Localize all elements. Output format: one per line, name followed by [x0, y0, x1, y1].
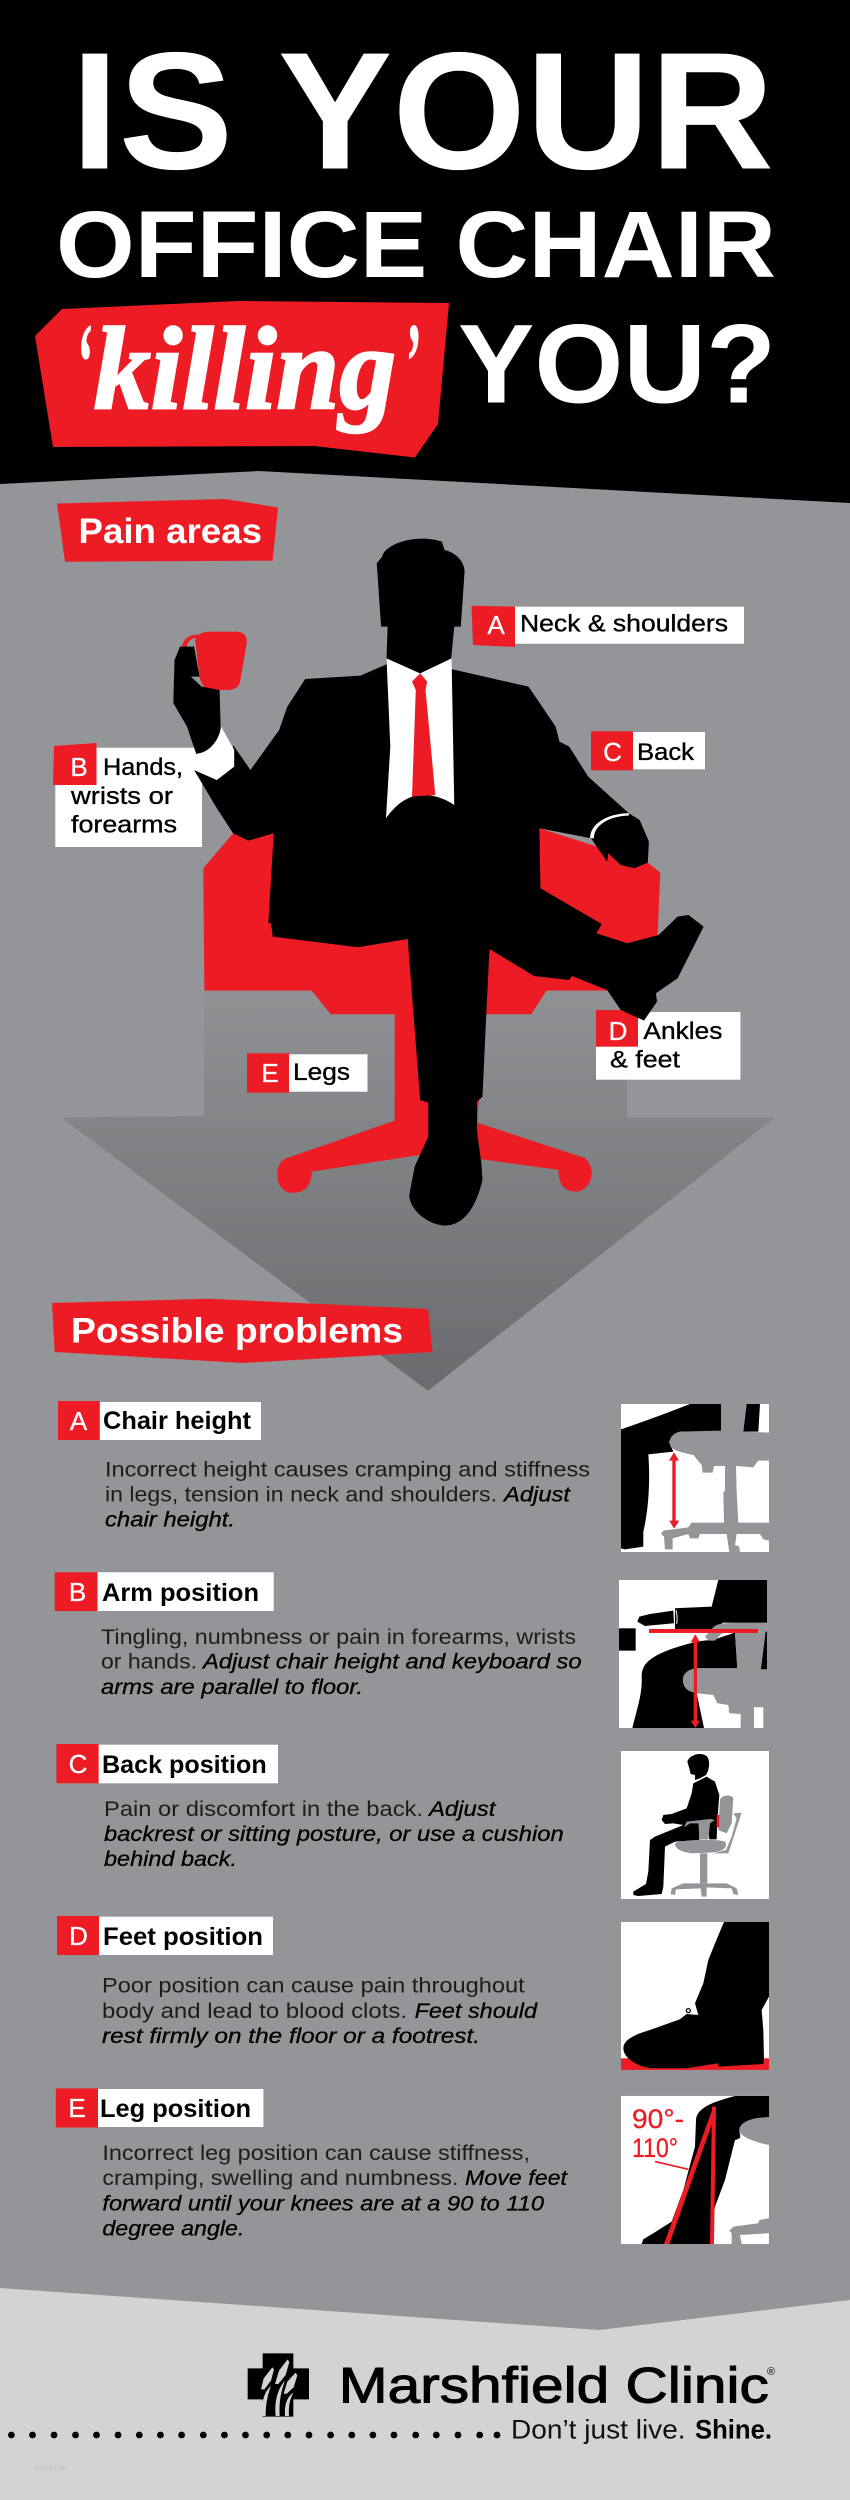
label C: back: Back [637, 739, 695, 766]
text: back position [104, 1798, 564, 1871]
text: arm position: arms are parallel to floor. [101, 1676, 363, 1699]
image: leg position [621, 2096, 769, 2244]
title: killing badge [35, 301, 449, 458]
red necktie [412, 673, 435, 797]
label D: ankles and feet: Ankles [643, 1018, 722, 1045]
tag: feet position: Feet position [103, 1923, 263, 1951]
text: arm position: Tingling, numbness or pain in forearms, wrists [101, 1626, 576, 1649]
angle label: 90°- [632, 2104, 684, 2134]
text: feet position: body and lead to blood clots. [102, 2000, 407, 2023]
tag: back position: C [69, 1749, 87, 1779]
chair back and frame [713, 1796, 742, 1853]
label E: legs: E [261, 1058, 279, 1088]
chair seat and base [671, 1819, 738, 1897]
text: chair height: Incorrect height causes cramping and stiffness [105, 1459, 590, 1482]
text: leg position: degree angle. [102, 2218, 244, 2240]
registered mark: ® [767, 2366, 775, 2378]
coffee mug [184, 632, 247, 690]
tagline: Don’t just live. [511, 2415, 686, 2445]
white shirt cuff [194, 727, 234, 780]
tag: leg position [56, 2088, 263, 2128]
title: you: YOU? [458, 302, 776, 426]
arrow: chair height [669, 1452, 679, 1529]
label E: legs [247, 1053, 368, 1093]
text: chair height [105, 1459, 590, 1532]
image: arm position [619, 1580, 767, 1728]
title: killing badge: ‘ [76, 301, 92, 423]
hand and wrist [173, 647, 221, 754]
tag: chair height: A [70, 1406, 88, 1436]
text: leg position [102, 2142, 568, 2240]
title: is your: IS YOUR [71, 18, 774, 204]
image: back position [621, 1751, 769, 1899]
title: office chair: OFFICE CHAIR [56, 192, 776, 298]
tagline [511, 2415, 772, 2445]
text: leg position: Incorrect leg position can cause stiffness, [102, 2142, 530, 2165]
background arrow [61, 950, 775, 1391]
text: back position: Adjust [427, 1798, 497, 1821]
label A: neck and shoulders [472, 606, 744, 647]
label A: neck and shoulders: Neck & shoulders [520, 611, 728, 638]
dotted line [8, 2432, 500, 2438]
tag: back position [56, 1744, 278, 1783]
problem B: arm position [55, 1572, 767, 1728]
header panel [0, 0, 850, 503]
label C: back: C [603, 737, 622, 767]
text: feet position: rest firmly on the floor or a footrest. [102, 2025, 480, 2048]
problem D: feet position [57, 1916, 769, 2070]
heading: possible problems [52, 1299, 432, 1363]
tag: arm position: Arm position [102, 1579, 259, 1607]
label E: legs: Legs [293, 1059, 350, 1086]
text: feet position [102, 1975, 538, 2048]
label C: back [591, 731, 705, 770]
text: chair height: Adjust [502, 1484, 571, 1507]
image: leg position: 110° [632, 2133, 678, 2163]
text: feet position: Poor position can cause pain throughout [102, 1975, 525, 1998]
job number: 12839-000 [33, 2465, 67, 2472]
icon: marshfield clinic logo [248, 2353, 309, 2417]
tag: chair height: Chair height [103, 1407, 252, 1435]
man silhouette [194, 539, 704, 1226]
title: killing badge: ’ [404, 301, 420, 423]
tag: feet position: D [69, 1921, 88, 1951]
text: back position: Pain or discomfort in the back. [104, 1798, 423, 1821]
tag: arm position: B [69, 1577, 86, 1607]
label B: hands, wrists or forearms: B [70, 752, 88, 782]
tag: feet position [57, 1916, 273, 1955]
heading: possible problems: Possible problems [71, 1312, 403, 1351]
text: leg position: cramping, swelling and numbness. [102, 2167, 458, 2190]
text: arm position [101, 1626, 582, 1699]
red office chair [203, 828, 660, 1193]
problem A: chair height [58, 1401, 769, 1552]
label B: hands, wrists or forearms: wrists or [70, 783, 173, 810]
text: feet position: Feet should [415, 2000, 538, 2023]
label A: neck and shoulders: A [487, 610, 505, 640]
tag: arm position [55, 1572, 274, 1611]
label D: ankles and feet: D [609, 1016, 627, 1046]
text: back position: backrest or sitting posture, or use a cushion [104, 1823, 564, 1846]
text: arm position: Adjust chair height and keyboard so [201, 1651, 582, 1674]
label B: hands, wrists or forearms: forearms [71, 812, 177, 839]
text: arm position: or hands. [101, 1651, 197, 1674]
label D: ankles and feet: & feet [610, 1047, 680, 1074]
problem C: back position [56, 1744, 769, 1899]
footer panel [0, 2288, 850, 2500]
label D: ankles and feet [596, 1010, 740, 1080]
text: chair height: chair height. [105, 1509, 235, 1532]
label B: hands, wrists or forearms: Hands, [103, 754, 183, 781]
logo wordmark: Marshfield Clinic [339, 2358, 769, 2414]
tagline: Shine. [695, 2415, 772, 2445]
text: chair height: in legs, tension in neck and shoulders. [105, 1484, 497, 1507]
problem E: leg position [56, 2088, 769, 2244]
text: leg position: forward until your knees are at a 90 to 110 [102, 2193, 544, 2216]
seated man illustration with chair [173, 539, 704, 1226]
heading: pain areas: Pain areas [78, 512, 262, 551]
tag: leg position: Leg position [100, 2095, 251, 2123]
tag: back position: Back position [102, 1751, 267, 1779]
label B: hands, wrists or forearms [53, 743, 202, 847]
white shirt [386, 658, 454, 818]
wrist cuff [592, 814, 629, 838]
title: killing badge: killing [94, 303, 396, 434]
text: leg position: Move feet [465, 2167, 568, 2190]
image: chair height [621, 1404, 769, 1552]
heading: pain areas [57, 499, 278, 562]
arrow: arm height [649, 1629, 758, 1728]
text: back position: behind back. [104, 1848, 237, 1871]
tag: leg position: E [68, 2093, 86, 2123]
tag: chair height [58, 1401, 261, 1440]
image: feet position [621, 1922, 769, 2070]
